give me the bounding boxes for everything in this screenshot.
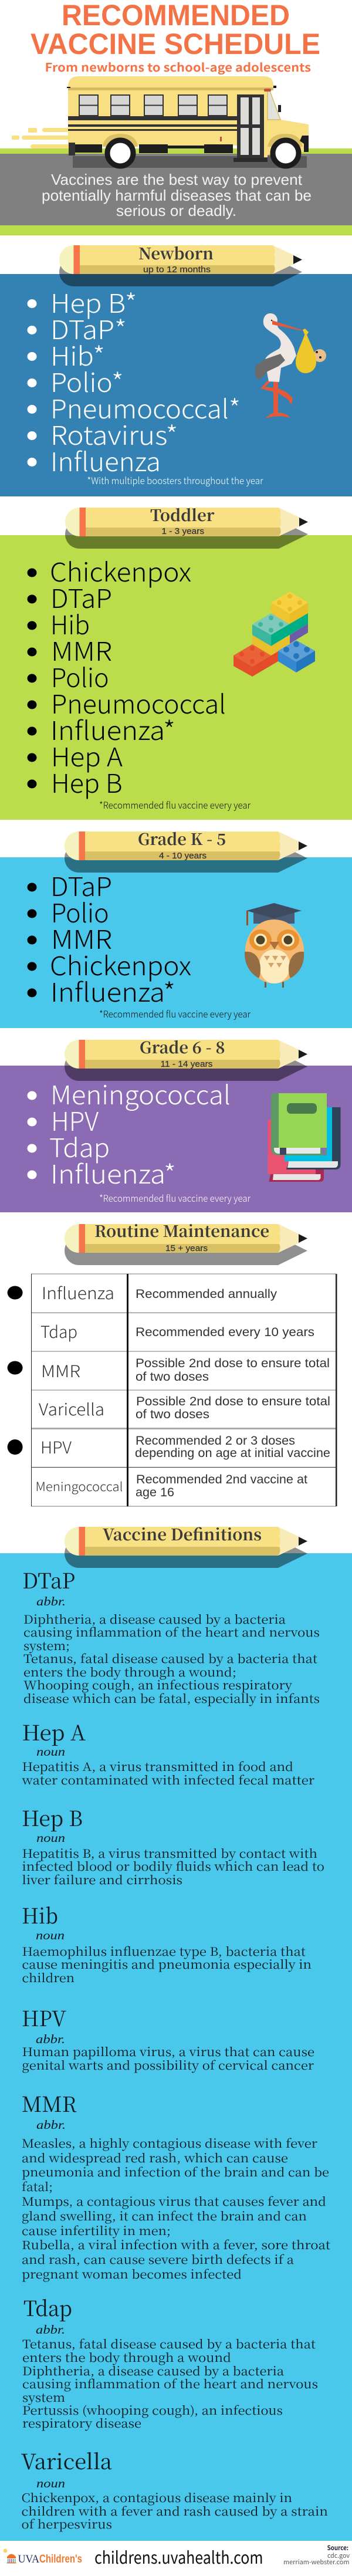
- grade 6-8 vaccine list: Influenza*: [50, 1154, 176, 1191]
- toddler vaccine list: Pneumococcal: [51, 684, 226, 721]
- table row: HPV: depending on age at initial vaccine: [135, 1446, 330, 1460]
- table row: influenza: Recommended annually: [136, 1287, 277, 1301]
- newborn vaccine list: Pneumococcal*: [50, 388, 241, 426]
- definition: Hep A: Hep A: [22, 1717, 86, 1747]
- grade K-5 vaccine list: DTaP: [50, 866, 112, 904]
- intro text: [42, 171, 312, 219]
- toddler vaccine list: [27, 552, 226, 800]
- definition: Tdap: enters the body through a wound: [22, 2348, 231, 2365]
- footnote: grade K-5: *Recommended flu vaccine every year: [99, 1006, 251, 1020]
- heading: grade 6-8 pencil: Grade 6 - 8: [140, 1035, 225, 1058]
- icon: school bus: [12, 76, 309, 168]
- grade 6-8 vaccine list: [27, 1074, 231, 1191]
- grade K-5 vaccine list: MMR: [51, 919, 112, 956]
- definition: DTaP: [22, 1565, 320, 1706]
- panel: grade K-5: [0, 827, 352, 1028]
- definition: Tdap: Tetanus, fatal disease caused by a bacteria that: [22, 2335, 316, 2352]
- definition: MMR: and rash, can cause severe birth defects if a: [22, 2250, 294, 2267]
- title: VACCINE SCHEDULE: [31, 28, 320, 60]
- grade 6-8 vaccine list: Meningococcal: [50, 1074, 231, 1112]
- newborn vaccine list: Hep B*: [50, 283, 137, 320]
- definition: Hep B: [22, 1803, 324, 1888]
- definition: HPV: [22, 2003, 314, 2073]
- source credits: [283, 2543, 350, 2567]
- toddler vaccine list: Chickenpox: [50, 552, 191, 589]
- heading: toddler pencil: 1 - 3 years: [162, 526, 204, 536]
- definition: HPV: abbr.: [36, 2032, 65, 2046]
- toddler vaccine list: Hep B: [51, 763, 123, 800]
- definition: Hib: [22, 1900, 312, 1986]
- definition: MMR: MMR: [22, 2088, 77, 2118]
- definition: Tdap: [22, 2293, 318, 2431]
- heading: grade 6-8 pencil: 11 - 14 years: [161, 1059, 212, 1069]
- definition: HPV: HPV: [22, 2003, 66, 2033]
- definition: Varicella: Varicella: [21, 2446, 112, 2476]
- panel: routine maintenance: [8, 1219, 337, 1507]
- source credits: Source:: [327, 2543, 348, 2553]
- definition: DTaP: Tetanus, fatal disease caused by a bacteria that: [23, 1649, 318, 1666]
- toddler vaccine list: Hib: [50, 604, 90, 642]
- subtitle: From newborns to school-age adolescents: [45, 58, 311, 75]
- footer: [4, 2543, 350, 2569]
- definition: MMR: abbr.: [36, 2118, 66, 2132]
- table row: meningococcal: Meningococcal: [35, 1478, 123, 1495]
- grade K-5 vaccine list: Influenza*: [50, 972, 175, 1009]
- definition: MMR: pneumonia and infection of the brain and can be: [22, 2163, 329, 2180]
- toddler vaccine list: DTaP: [50, 578, 112, 616]
- definition: DTaP: Diphtheria, a disease caused by a bacteria: [23, 1610, 286, 1627]
- definition: DTaP: disease which can be fatal, especially in infants: [23, 1689, 320, 1706]
- table row: influenza: [8, 1281, 277, 1304]
- panel: toddler: [0, 503, 352, 820]
- definition: Varicella: of herpesvirus: [21, 2515, 112, 2532]
- definition: Tdap: system: [22, 2388, 65, 2405]
- definition: MMR: pregnant woman becomes infected: [22, 2265, 242, 2282]
- definition: DTaP: system;: [23, 1637, 70, 1654]
- heading: grade K-5 pencil: [65, 827, 307, 873]
- definition: MMR: [22, 2088, 331, 2282]
- definition: MMR: cause infertility in men;: [22, 2222, 171, 2239]
- table row: varicella: [39, 1395, 330, 1421]
- panel: vaccine definitions: [0, 1522, 352, 2541]
- definition: HPV: genital warts and possibility of cervical cancer: [22, 2056, 314, 2073]
- intro text: Vaccines are the best way to prevent: [51, 171, 303, 188]
- definition: DTaP: abbr.: [36, 1594, 66, 1608]
- table row: meningococcal: age 16: [136, 1486, 174, 1499]
- table row: MMR: [8, 1357, 330, 1384]
- intro text: serious or deadly.: [116, 202, 236, 219]
- grade K-5 vaccine list: [27, 866, 191, 1009]
- grade K-5 vaccine list: Chickenpox: [50, 945, 191, 983]
- definition: MMR: Measles, a highly contagious disease with fever: [22, 2134, 318, 2151]
- definition: Hep A: Hepatitis A, a virus transmitted in food and: [22, 1757, 293, 1774]
- icon: stork carrying baby: [255, 313, 326, 418]
- source credits: cdc.gov: [327, 2551, 350, 2560]
- table row: tdap: Recommended every 10 years: [136, 1326, 314, 1339]
- definition: Hib: noun: [36, 1928, 65, 1942]
- title: [31, 0, 320, 60]
- definition: Hep B: infected blood or bodily fluids which can lead to: [22, 1857, 324, 1874]
- heading: grade 6-8 pencil: [65, 1035, 307, 1081]
- definition: DTaP: DTaP: [22, 1565, 75, 1595]
- heading: vaccine definitions pencil: Vaccine Definitions: [103, 1522, 262, 1545]
- toddler vaccine list: Influenza*: [50, 710, 175, 748]
- table row: meningococcal: Recommended 2nd vaccine at: [136, 1473, 307, 1486]
- table row: MMR: Possible 2nd dose to ensure total: [136, 1357, 330, 1370]
- panel: newborn: [0, 241, 352, 496]
- definition: Hep A: [21, 1717, 315, 1788]
- table row: varicella: Possible 2nd dose to ensure total: [136, 1395, 330, 1408]
- heading: toddler pencil: Toddler: [150, 503, 215, 526]
- grade K-5 vaccine list: Polio: [51, 893, 109, 930]
- definition: Tdap: causing inflammation of the heart and nervous: [22, 2375, 318, 2392]
- heading: newborn pencil: up to 12 months: [143, 265, 211, 275]
- footnote: toddler: *Recommended flu vaccine every year: [99, 797, 251, 812]
- definition: MMR: gland swelling, it can infect the brain and can: [22, 2207, 307, 2224]
- footnote: newborn: *With multiple boosters throughout the year: [87, 473, 263, 487]
- definition: DTaP: causing inflammation of the heart and nervous: [23, 1623, 320, 1640]
- logo: UVA Children's: UVA: [18, 2553, 39, 2565]
- definition: Hib: Haemophilus influenzae type B, bacteria that: [22, 1942, 306, 1959]
- heading: toddler pencil: [65, 503, 308, 549]
- definition: Hib: cause meningitis and pneumonia especially in: [22, 1955, 312, 1972]
- definition: MMR: fatal;: [22, 2178, 53, 2195]
- logo: UVA Children's: Children's: [39, 2553, 82, 2565]
- heading: grade K-5 pencil: 4 - 10 years: [159, 851, 207, 861]
- definition: Varicella: [21, 2446, 328, 2532]
- definition: Varicella: children with a fever and rash caused by a strain: [21, 2502, 328, 2519]
- icon: toy bricks: [233, 591, 315, 677]
- definition: MMR: Rubella, a viral infection with a fever, sore throat: [22, 2236, 331, 2253]
- grade 6-8 vaccine list: HPV: [51, 1101, 99, 1138]
- definition: Tdap: respiratory disease: [22, 2414, 141, 2431]
- definition: Hep B: Hep B: [22, 1803, 83, 1833]
- footnote: grade 6-8: *Recommended flu vaccine every year: [99, 1191, 251, 1205]
- definition: Tdap: Pertussis (whooping cough), an infectious: [22, 2401, 283, 2418]
- newborn vaccine list: DTaP*: [50, 309, 127, 347]
- road and intro panel: [0, 148, 352, 235]
- icon: owl with graduation cap: [245, 903, 304, 988]
- heading: routine maintenance pencil: 15 + years: [165, 1243, 208, 1253]
- heading: routine maintenance pencil: Routine Maintenance: [94, 1219, 269, 1242]
- toddler vaccine list: MMR: [51, 631, 112, 668]
- table row: HPV: [8, 1434, 330, 1460]
- website url: childrens.uvahealth.com: [94, 2544, 263, 2569]
- definition: MMR: and widespread red rash, which can cause: [22, 2149, 288, 2166]
- table row: influenza: Influenza: [42, 1281, 114, 1304]
- table row: HPV: HPV: [40, 1435, 72, 1459]
- heading: newborn pencil: [59, 241, 302, 286]
- logo: UVA Children's: [4, 2549, 82, 2565]
- source credits: merriam-webster.com: [283, 2557, 350, 2567]
- newborn vaccine list: Influenza: [50, 441, 161, 479]
- definition: Hep A: noun: [36, 1745, 65, 1759]
- definition: DTaP: Whooping cough, an infectious respiratory: [23, 1676, 293, 1693]
- heading: newborn pencil: Newborn: [138, 241, 214, 264]
- table row: varicella: Varicella: [39, 1397, 104, 1421]
- heading: routine maintenance pencil: [65, 1219, 307, 1265]
- definition: Hep B: noun: [36, 1831, 65, 1845]
- toddler vaccine list: Hep A: [51, 736, 123, 774]
- newborn vaccine list: [27, 283, 241, 479]
- newborn vaccine list: Hib*: [50, 336, 105, 373]
- table row: tdap: [40, 1320, 314, 1343]
- definition: Tdap: Diphtheria, a disease caused by a bacteria: [22, 2362, 284, 2379]
- heading: grade K-5 pencil: Grade K - 5: [138, 827, 226, 850]
- toddler vaccine list: Polio: [51, 657, 109, 695]
- definition: Hib: children: [22, 1969, 75, 1986]
- intro text: potentially harmful diseases that can be: [42, 187, 312, 204]
- heading: vaccine definitions pencil: [65, 1522, 307, 1568]
- definition: Varicella: Chickenpox, a contagious disease mainly in: [21, 2489, 292, 2506]
- definition: Hep A: water contaminated with infected fecal matter: [21, 1771, 315, 1788]
- definition: Hep B: Hepatitis B, a virus transmitted by contact with: [22, 1844, 317, 1861]
- table row: HPV: Recommended 2 or 3 doses: [136, 1434, 295, 1448]
- definition: Varicella: noun: [36, 2476, 65, 2490]
- table: routine maintenance schedule: [8, 1273, 337, 1507]
- definition: HPV: Human papilloma virus, a virus that can cause: [22, 2043, 314, 2060]
- definition: MMR: Mumps, a contagious virus that causes fever and: [22, 2192, 326, 2209]
- grade 6-8 vaccine list: Tdap: [49, 1127, 110, 1165]
- definition: Tdap: abbr.: [36, 2323, 65, 2337]
- table row: MMR: of two doses: [136, 1370, 209, 1384]
- definition: Hib: Hib: [22, 1900, 58, 1930]
- table row: varicella: of two doses: [136, 1408, 209, 1421]
- definition: Tdap: Tdap: [23, 2293, 72, 2323]
- newborn vaccine list: Rotavirus*: [50, 415, 178, 452]
- panel: grade 6-8: [0, 1035, 352, 1212]
- definition: DTaP: enters the body through a wound;: [23, 1663, 236, 1680]
- newborn vaccine list: Polio*: [50, 362, 123, 400]
- table row: tdap: Tdap: [40, 1320, 77, 1343]
- table row: meningococcal: [35, 1473, 307, 1499]
- icon: stack of books: [268, 1093, 340, 1182]
- table row: MMR: MMR: [41, 1359, 80, 1382]
- definition: Hep B: liver failure and cirrhosis: [22, 1871, 182, 1888]
